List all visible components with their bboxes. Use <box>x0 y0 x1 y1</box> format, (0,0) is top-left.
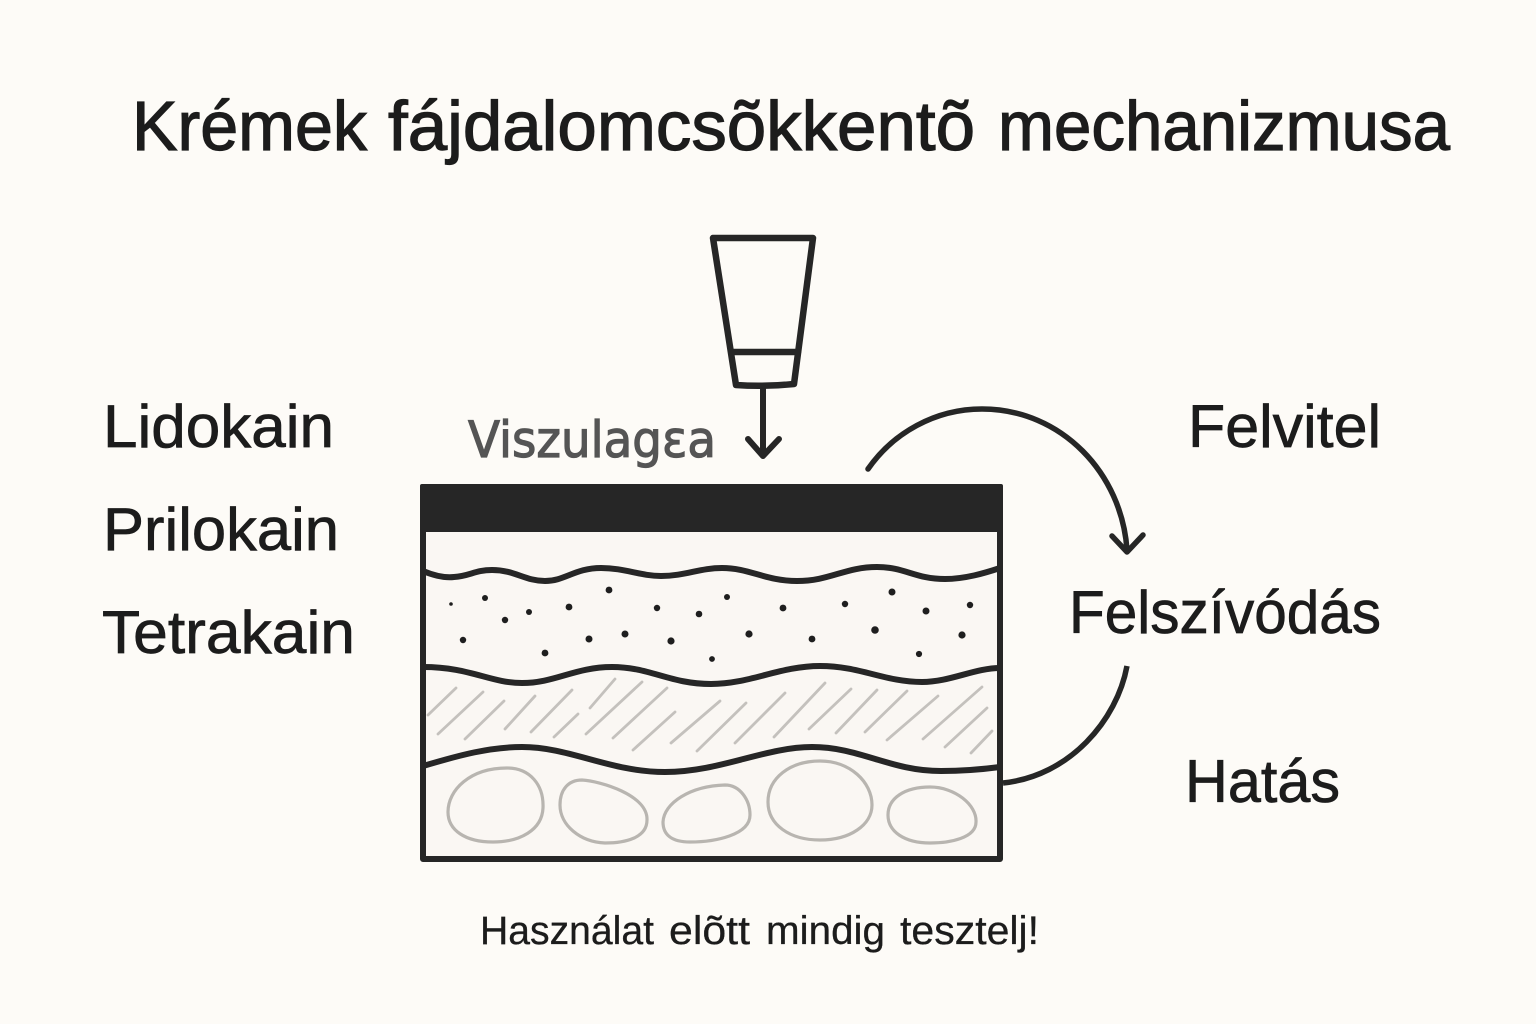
title <box>132 87 1450 165</box>
layer: fat cells <box>448 761 976 843</box>
diagram frame <box>423 487 1000 859</box>
title: Krémek <box>132 87 368 165</box>
title: mechanizmusa <box>998 87 1450 165</box>
icon: cream tube <box>713 238 813 386</box>
footer note: tesztelj! <box>900 909 1039 953</box>
label: Prilokain: Prilokain <box>103 496 339 563</box>
handwritten label: Viszulagεa <box>468 411 716 469</box>
label: Hatás: Hatás <box>1185 748 1340 815</box>
label: Felvitel: Felvitel <box>1188 393 1381 460</box>
footer note: Használat <box>480 909 654 953</box>
skin cross-section diagram <box>420 484 1003 859</box>
label: Lidokain: Lidokain <box>103 393 334 460</box>
left list of anaesthetics <box>102 393 355 666</box>
footer note: mindig <box>766 909 885 953</box>
layer boundaries: wavy lines <box>423 567 1000 772</box>
right labels <box>1069 393 1381 815</box>
top layer: dark epidermis band <box>420 484 1003 532</box>
layer: speckled dots <box>449 587 973 662</box>
label: Tetrakain: Tetrakain <box>102 599 355 666</box>
arrow: tube down to skin <box>748 386 779 456</box>
title: fájdalomcsõkkentõ <box>388 87 975 165</box>
skin background <box>423 487 1000 859</box>
footer note <box>480 909 1039 953</box>
footer note: elõtt <box>669 909 750 953</box>
layer: diagonal hatching <box>428 679 992 753</box>
arrow: application to absorption <box>868 409 1143 552</box>
arrow: absorption to effect <box>1003 666 1127 783</box>
label: Felszívódás: Felszívódás <box>1069 579 1381 646</box>
